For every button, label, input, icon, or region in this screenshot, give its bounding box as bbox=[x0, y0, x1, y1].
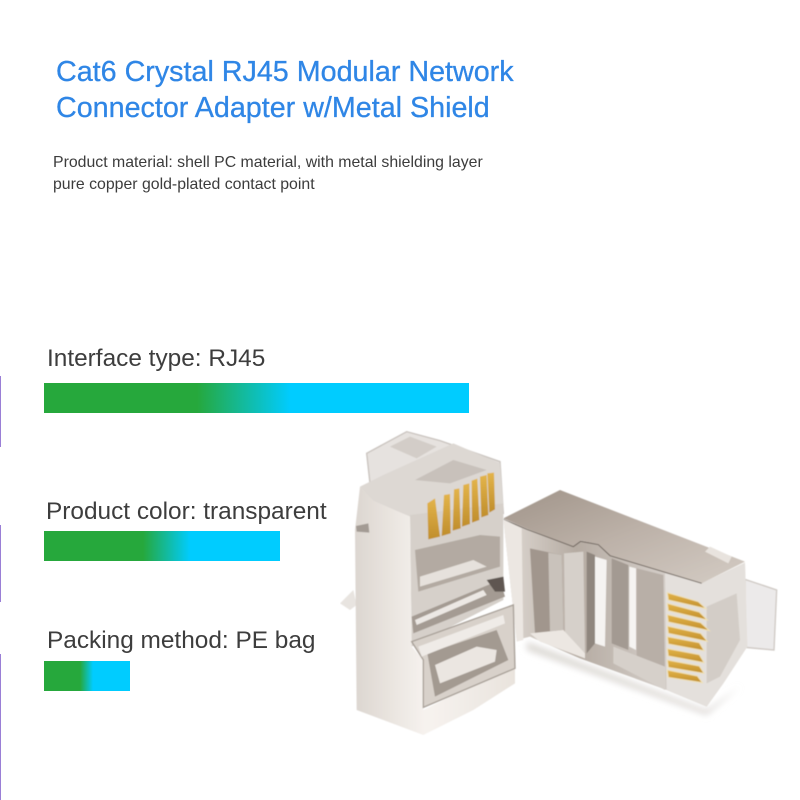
product material text: pure copper gold-plated contact point bbox=[53, 176, 315, 192]
nose shading bbox=[707, 593, 740, 683]
front clear nose bbox=[665, 563, 747, 707]
dark clip bbox=[487, 577, 505, 592]
title bbox=[56, 56, 514, 124]
window bottom ledge bbox=[530, 630, 585, 658]
shield strip bbox=[503, 519, 523, 642]
front clear top bbox=[360, 443, 503, 517]
product material text bbox=[53, 154, 483, 192]
glass side bbox=[503, 520, 747, 707]
left side tab bbox=[340, 590, 357, 610]
left connector bbox=[340, 432, 515, 735]
window 1 bbox=[530, 548, 563, 633]
title: Cat6 Crystal RJ45 Modular Network bbox=[56, 56, 514, 88]
top edge highlight bbox=[503, 519, 702, 583]
silver top bbox=[503, 490, 745, 583]
label: interface type: Interface type: RJ45 bbox=[47, 345, 265, 372]
gold pins bbox=[427, 473, 495, 539]
gold pins bbox=[667, 593, 709, 683]
lower socket bbox=[412, 605, 515, 707]
left edge mark 3 bbox=[0, 654, 1, 800]
left edge mark 1 bbox=[0, 376, 1, 447]
rear ridges bbox=[390, 437, 437, 458]
top tab bbox=[705, 547, 732, 563]
silver body bbox=[355, 487, 515, 735]
product material text: Product material: shell PC material, with metal shielding layer bbox=[53, 154, 483, 170]
window 2 bar bbox=[595, 557, 607, 647]
right connector bbox=[503, 490, 777, 715]
title: Connector Adapter w/Metal Shield bbox=[56, 92, 490, 124]
label: packing method: Packing method: PE bag bbox=[47, 627, 315, 654]
bar: interface type bbox=[44, 383, 469, 413]
bar: product color bbox=[44, 531, 280, 561]
product photo: RJ45 connectors bbox=[340, 430, 778, 735]
rear clear top bbox=[367, 432, 503, 513]
clear tab bbox=[745, 579, 777, 650]
side notch bbox=[356, 523, 369, 533]
shadow bbox=[527, 642, 740, 715]
bar: packing method bbox=[44, 661, 130, 691]
label: product color: Product color: transparent bbox=[46, 498, 327, 525]
window 3 bbox=[612, 558, 628, 650]
clear center bbox=[410, 503, 503, 647]
left edge mark 2 bbox=[0, 525, 1, 602]
top ridges bbox=[415, 460, 487, 483]
